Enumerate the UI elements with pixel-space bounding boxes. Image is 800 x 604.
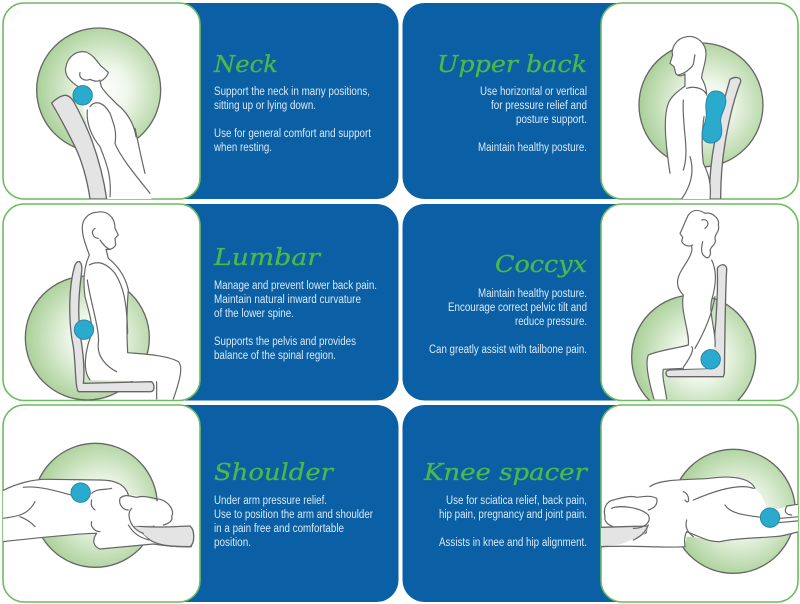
cushion: upper back bbox=[702, 91, 726, 143]
text: coccyx description: reduce pressure. bbox=[515, 316, 587, 328]
illustration: man reclining with neck cushion bbox=[37, 28, 161, 199]
blue card: knee spacer bbox=[402, 405, 650, 602]
illustration: seated man with upper back cushion bbox=[639, 36, 763, 199]
blue card: lumbar bbox=[150, 204, 398, 400]
cushion: knee spacer bbox=[760, 508, 780, 527]
text: lumbar description: Manage and prevent lower back pain. bbox=[214, 280, 377, 292]
heading: coccyx: Coccyx bbox=[495, 250, 587, 278]
white illustration card: upper back bbox=[601, 3, 798, 199]
panel: upper back bbox=[402, 3, 798, 199]
text: neck description: sitting up or lying down. bbox=[214, 100, 316, 112]
illustration: seated woman with coccyx cushion bbox=[632, 210, 756, 419]
white illustration card: lumbar bbox=[3, 204, 200, 400]
white illustration card: knee spacer bbox=[601, 405, 798, 602]
text: shoulder description: position. bbox=[214, 537, 251, 549]
text: upper back description bbox=[478, 86, 587, 154]
text: knee spacer description: hip pain, pregnancy and joint pain. bbox=[439, 509, 587, 521]
text: neck description: Use for general comfort and support bbox=[214, 128, 372, 140]
text: knee spacer description bbox=[439, 495, 587, 549]
text: neck description: when resting. bbox=[213, 142, 272, 154]
heading: upper back: Upper back bbox=[437, 50, 587, 78]
text: coccyx description bbox=[429, 288, 587, 356]
text: knee spacer description: Assists in knee and hip alignment. bbox=[439, 537, 587, 549]
text: coccyx description: Maintain healthy posture. bbox=[478, 288, 587, 300]
text: neck description: Support the neck in many positions, bbox=[214, 86, 370, 98]
text: upper back description: Use horizontal or vertical bbox=[480, 86, 587, 98]
cushion: shoulder bbox=[71, 483, 90, 502]
cushion: coccyx bbox=[701, 350, 720, 369]
illustration: woman lying with shoulder cushion bbox=[3, 443, 194, 567]
blue card: upper back bbox=[402, 3, 650, 199]
panel: shoulder bbox=[3, 405, 399, 602]
white illustration card: coccyx bbox=[601, 204, 798, 400]
illustration: woman lying with knee spacer bbox=[600, 449, 800, 573]
panel: coccyx bbox=[402, 204, 798, 419]
heading: shoulder: Shoulder bbox=[214, 458, 335, 486]
text: knee spacer description: Use for sciatica relief, back pain, bbox=[446, 495, 587, 507]
blue card: coccyx bbox=[402, 204, 650, 400]
white illustration card: shoulder bbox=[3, 405, 200, 602]
text: neck description bbox=[213, 86, 372, 154]
text: upper back description: Maintain healthy posture. bbox=[478, 142, 587, 154]
panel: neck bbox=[3, 3, 398, 199]
text: shoulder description bbox=[214, 495, 373, 549]
heading: knee spacer: Knee spacer bbox=[423, 458, 589, 486]
illustration: seated man with lumbar cushion bbox=[25, 212, 181, 400]
text: shoulder description: Under arm pressure relief. bbox=[214, 495, 327, 507]
text: lumbar description: of the lower spine. bbox=[214, 308, 294, 320]
blue card: neck bbox=[150, 3, 398, 199]
cushion: lumbar bbox=[74, 320, 94, 339]
panel: lumbar bbox=[3, 204, 398, 400]
text: lumbar description: balance of the spinal region. bbox=[214, 350, 336, 362]
text: lumbar description: Supports the pelvis and provides bbox=[214, 336, 356, 348]
text: lumbar description: Maintain natural inward curvature bbox=[214, 294, 361, 306]
cushion: neck bbox=[73, 86, 92, 105]
text: upper back description: posture support. bbox=[516, 114, 587, 126]
text: shoulder description: in a pain free and comfortable bbox=[214, 523, 344, 535]
heading: lumbar: Lumbar bbox=[213, 243, 322, 271]
white illustration card: neck bbox=[3, 3, 200, 199]
heading: neck: Neck bbox=[213, 50, 278, 78]
blue card: shoulder bbox=[150, 405, 398, 602]
text: lumbar description bbox=[214, 280, 377, 362]
text: upper back description: for pressure relief and bbox=[491, 100, 587, 112]
panel: knee spacer bbox=[402, 405, 800, 602]
text: shoulder description: Use to position the arm and shoulder bbox=[214, 509, 373, 521]
text: coccyx description: Encourage correct pelvic tilt and bbox=[448, 302, 587, 314]
text: coccyx description: Can greatly assist with tailbone pain. bbox=[429, 344, 587, 356]
